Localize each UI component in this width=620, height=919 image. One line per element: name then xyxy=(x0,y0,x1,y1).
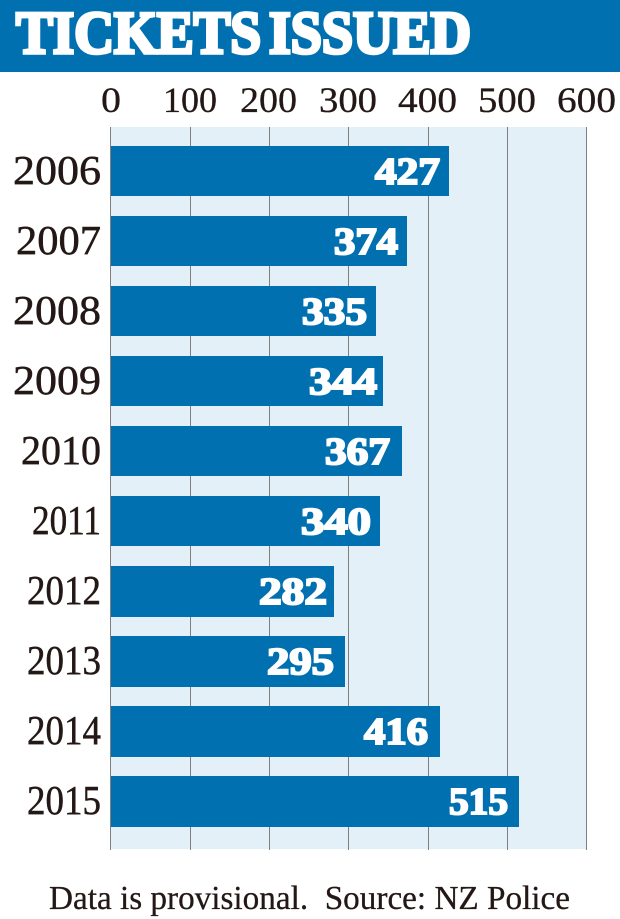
x axis labels: 400 xyxy=(398,80,457,120)
row 2008 xyxy=(13,286,376,336)
row 2009 xyxy=(13,356,383,406)
chart background and gridlines xyxy=(110,127,587,850)
x axis labels: 300 xyxy=(319,80,377,120)
x axis labels: 0 xyxy=(101,80,121,120)
row 2009: 2009 xyxy=(13,357,101,403)
row 2013: 2013 xyxy=(27,637,101,683)
row 2014: 416 xyxy=(364,711,428,753)
x axis labels xyxy=(101,80,616,120)
row 2008: 2008 xyxy=(13,287,101,333)
header banner xyxy=(0,0,620,72)
row 2006: 427 xyxy=(375,151,440,193)
x axis labels: 600 xyxy=(557,80,616,120)
row 2010: 367 xyxy=(325,431,390,473)
row 2013: 295 xyxy=(267,641,334,683)
title: TICKETS xyxy=(16,0,261,66)
row 2007: 2007 xyxy=(16,217,101,263)
row 2010: 2010 xyxy=(21,427,101,473)
row 2007 xyxy=(16,216,407,266)
row 2015: 2015 xyxy=(27,777,101,823)
source note: Data is provisional. Source: NZ Police xyxy=(49,880,570,917)
row 2008: 335 xyxy=(302,291,367,333)
row 2014: 2014 xyxy=(27,707,101,753)
x axis labels: 500 xyxy=(478,80,536,120)
row 2013 xyxy=(27,636,345,687)
row 2011 xyxy=(32,496,380,546)
row 2009: 344 xyxy=(309,361,377,403)
row 2012 xyxy=(27,566,334,617)
x axis labels: 200 xyxy=(240,80,297,120)
row 2011: 340 xyxy=(301,501,371,543)
row 2012: 282 xyxy=(259,571,327,613)
row 2012: 2012 xyxy=(27,567,101,613)
row 2007: 374 xyxy=(334,221,398,263)
row 2006 xyxy=(13,146,449,196)
row 2015: 515 xyxy=(449,781,508,823)
row 2014 xyxy=(27,706,440,757)
row 2006: 2006 xyxy=(13,147,101,193)
row 2015 xyxy=(27,776,519,827)
x axis labels: 100 xyxy=(163,80,217,120)
title: ISSUED xyxy=(269,0,471,66)
row 2010 xyxy=(21,426,402,476)
row 2011: 2011 xyxy=(32,497,101,543)
